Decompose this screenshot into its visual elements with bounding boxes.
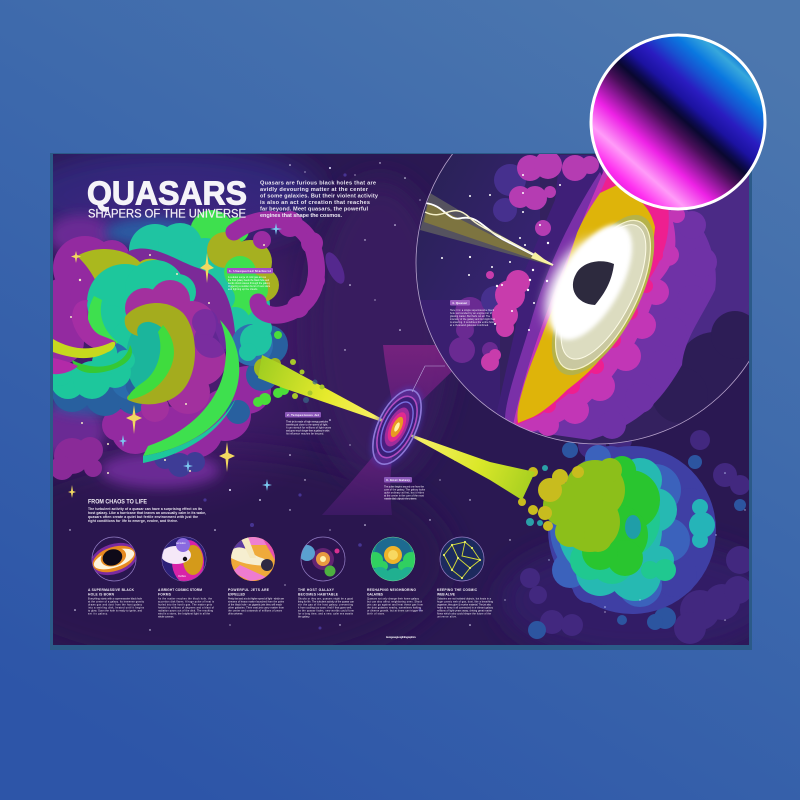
left teal blob bbox=[48, 349, 135, 399]
purple halo bbox=[520, 165, 716, 440]
far left purple cloud bbox=[449, 297, 498, 363]
blue haze behind cloud bbox=[50, 218, 195, 414]
label 1: unexpected starburst: the host galaxy feeds the black hole and bbox=[228, 279, 270, 282]
blue inner spot bbox=[625, 515, 641, 539]
label 2: tempestuous jet: It can stretch for millions of light-years bbox=[286, 426, 332, 430]
label 4: quasar: hole surrounded by an engine-hot of bbox=[450, 312, 492, 315]
step 6 text: WEB ALIVE bbox=[437, 592, 456, 596]
upper magenta clouds bbox=[509, 151, 599, 236]
zoom circle: quasar bbox=[410, 80, 775, 450]
footer credit: kurzgesagt.org/infographics bbox=[386, 635, 416, 639]
step 2 text: wind is a storm, the brightest light in all the bbox=[158, 612, 211, 616]
magnifier swatch circle bbox=[591, 35, 765, 209]
hot pink band bbox=[516, 175, 669, 425]
icon: cosmic storm bbox=[161, 537, 206, 584]
label 3: host galaxy: The pulse begins around one from the bbox=[384, 486, 425, 488]
section: from chaos to life bbox=[88, 498, 206, 523]
step 5 text: RESHAPING NEIGHBORING bbox=[367, 588, 416, 592]
step 3 text: streams of heavy matter launched from the poles bbox=[228, 600, 285, 604]
step 5 text: birth of stars. bbox=[367, 612, 385, 616]
step 2 text: accretion disk flares. A huge pulse of heat is bbox=[158, 600, 215, 604]
step 4 text: THE HOST GALAXY bbox=[298, 588, 335, 592]
label 2: tempestuous jet bbox=[285, 412, 332, 436]
left magenta tongue bbox=[53, 358, 78, 374]
label 4: quasar: at a thousand galaxies combined. bbox=[450, 324, 489, 327]
step 4 text: stir the gas of the host galaxy, preventing bbox=[298, 604, 354, 606]
blue streak by spiral bbox=[112, 343, 130, 400]
magenta cloud body bbox=[513, 170, 675, 432]
blue layer bbox=[550, 445, 690, 607]
step 2 text bbox=[158, 588, 215, 618]
step 3 text: of its universe. bbox=[228, 612, 243, 616]
step 6 text bbox=[437, 588, 494, 618]
step 4 text: BECOMES HABITABLE bbox=[298, 592, 339, 596]
step 3 text: the center and outwards of millions of years bbox=[228, 610, 283, 612]
sparkle stars bbox=[68, 223, 282, 498]
intro text: far beyond. Meet quasars, the powerful bbox=[260, 206, 368, 212]
section body: host galaxy. Like a hurricane that leaves an unusually calm in its wake, bbox=[88, 511, 206, 515]
zoom circle outline bbox=[416, 82, 778, 444]
label 1: unexpected starburst bbox=[227, 268, 273, 291]
lower purple blue puffs bbox=[154, 447, 205, 477]
step 4 text: Shocks or they are, quasars might be a good bbox=[298, 598, 354, 600]
step 4 text bbox=[298, 588, 355, 618]
intro text: engines that shape the cosmos. bbox=[260, 213, 342, 219]
galaxy callout line bbox=[412, 366, 445, 392]
section heading: FROM CHAOS TO LIFE bbox=[88, 498, 147, 506]
step 4 text: it from cooling too soon. And if that goes well, bbox=[298, 606, 352, 610]
step 2 text: radiation pours out of the disk. The resulting bbox=[158, 610, 214, 612]
small blue puffs bbox=[528, 442, 746, 639]
step 6 text: huge cosmic web of gas, dust, like a breathing bbox=[437, 600, 494, 604]
blue layer bbox=[52, 325, 288, 424]
surrounding purple clouds bbox=[520, 428, 754, 644]
purple band left of disk bbox=[505, 172, 604, 428]
poster bbox=[53, 154, 749, 645]
central spiral olive bbox=[125, 303, 195, 404]
left magenta clouds bbox=[481, 270, 530, 371]
label 3: host galaxy: at the center in the core of the most bbox=[384, 494, 424, 498]
icon: host galaxy habitable bbox=[299, 537, 345, 581]
step 2 text: whole cosmos. bbox=[158, 616, 174, 618]
intro text: is also an act of creation that reaches bbox=[260, 200, 370, 206]
dark strip left of disk bbox=[495, 155, 604, 430]
pale rings bbox=[531, 200, 675, 390]
title block bbox=[87, 174, 247, 220]
step 5 text: but can also affect neighboring ones. Shock bbox=[367, 600, 423, 604]
right galactic jet bbox=[399, 430, 584, 531]
purple haze behind cloud bbox=[35, 215, 220, 488]
cloud star dots bbox=[70, 244, 265, 474]
step 5 text: GALAXIES bbox=[367, 592, 384, 596]
section body: quasars often create a quiet but fertile environment with just the bbox=[88, 515, 198, 519]
title: QUASARS bbox=[87, 174, 247, 212]
step 6 text: flows which also could shape the future of the bbox=[437, 612, 492, 616]
step 3 text bbox=[228, 588, 285, 616]
label 1: unexpected starburst: triggering a sudden burst of new stars bbox=[228, 285, 271, 288]
label 2: tempestuous jet: and grow much longer than a galaxy is wide. bbox=[286, 430, 330, 432]
icon: cosmic storm: Outflow bbox=[178, 575, 186, 578]
label 1: unexpected starburst: A sudden surge of cold gas across bbox=[228, 276, 267, 279]
central teal core bbox=[126, 322, 161, 388]
label 2: tempestuous jet: 2. Tempestuous Jet bbox=[287, 413, 319, 417]
background dim blue star glows bbox=[203, 173, 422, 630]
black hole shadow bbox=[573, 261, 614, 305]
subtitle: SHAPERS OF THE UNIVERSE bbox=[88, 208, 246, 220]
purple band bbox=[127, 248, 236, 350]
label 4: quasar: is amazing. It outshines the entire host bbox=[450, 321, 494, 324]
teal layer bbox=[558, 458, 677, 601]
swirl right puff bbox=[326, 252, 344, 284]
green layer bbox=[582, 456, 660, 576]
debris particles bbox=[441, 174, 561, 331]
outer indigo disc bbox=[548, 446, 716, 614]
top green cap bbox=[191, 210, 248, 242]
step 5 text: or diverse growth, but at times can trigger the bbox=[367, 610, 424, 612]
outer dark clouds bbox=[652, 311, 759, 423]
step 5 text: the dust galaxies nearby, sometimes halting bbox=[367, 606, 422, 610]
label 2: tempestuous jet: Its influence reaches far beyond. bbox=[286, 432, 324, 436]
step 1 text: at the center of a galaxy. Its immense gravity bbox=[88, 600, 145, 604]
step 3 text: of the black hole - as gigantic jets they will reach bbox=[228, 604, 283, 606]
label 1: unexpected starburst: and lighting up the clouds. bbox=[228, 288, 258, 291]
step 1 text: to glow. Soon the hole is ready to ignite, and bbox=[88, 610, 143, 612]
step 6 text: organism, they give & receive material. The jet also bbox=[437, 604, 492, 606]
icon: supermassive black hole bbox=[87, 537, 141, 581]
icon: cosmic web bbox=[440, 537, 484, 581]
main teal body bbox=[87, 260, 196, 356]
label 3: host galaxy: massive black objects in the universe. bbox=[384, 498, 417, 500]
step 4 text: for a long time, and a new, calm era awaits bbox=[298, 612, 354, 616]
step 1 text: draws gas and dust from the host galaxy bbox=[88, 604, 143, 606]
intro text: avidly devouring matter at the center bbox=[260, 187, 369, 193]
step 6 text: KEEPING THE COSMIC bbox=[437, 588, 478, 592]
step 1 text: set its galaxy. bbox=[88, 612, 108, 616]
label 1: unexpected starburst: 1. Unexpected Starburst bbox=[229, 269, 271, 273]
upper teal arch bbox=[129, 223, 270, 327]
step 6 text: millions of light-years away, driving great matter bbox=[437, 610, 492, 612]
label 4: quasar: glowing matter. But that's not all. The bbox=[450, 315, 491, 318]
upper indigo clouds bbox=[481, 164, 526, 314]
teal bottom rim bbox=[143, 398, 236, 463]
left olive crescent bbox=[78, 249, 159, 280]
step 2 text: hurled into the host's gas. The matter gets bbox=[158, 604, 213, 606]
yellow disk bbox=[517, 185, 655, 423]
step 4 text: as the quasar fades, new worlds could form bbox=[298, 610, 354, 612]
step 1 text bbox=[88, 588, 145, 616]
left gas cloud bbox=[35, 210, 288, 488]
section body: The turbulent activity of a quasar can have a surprising effect on its bbox=[88, 507, 202, 511]
purple halo bumps bbox=[598, 211, 717, 439]
green inner right cloud bbox=[224, 256, 268, 316]
white glow bbox=[532, 229, 624, 341]
right gas cloud bbox=[399, 428, 754, 644]
label 3: host galaxy: quite ordinary at first, but it hides bbox=[384, 492, 425, 494]
left galactic jet bbox=[253, 331, 382, 422]
label 2: tempestuous jet: traveling at close to the speed of light. bbox=[286, 424, 328, 426]
step 3 text: EXPELLED bbox=[228, 592, 246, 596]
step 1 text: A SUPERMASSIVE BLACK bbox=[88, 588, 135, 592]
upper right magenta swirl bbox=[234, 211, 349, 318]
step 5 text: Quasars not only change their home galaxy bbox=[367, 598, 420, 600]
center magenta ring bbox=[125, 280, 226, 422]
sea green layer bbox=[570, 480, 676, 584]
green right ring bbox=[143, 320, 239, 456]
step 3 text: other galaxies. Their vast jets carry matter from bbox=[228, 606, 284, 610]
darker magenta right shade bbox=[192, 309, 226, 358]
right cloud dots bbox=[548, 472, 746, 608]
step 2 text: heated to millions of degrees and a blast of bbox=[158, 606, 214, 610]
green left rim bbox=[88, 296, 118, 350]
poster edge bbox=[50, 153, 752, 650]
step 2 text: A BRIGHT COSMIC STORM bbox=[158, 588, 202, 592]
lime front cloud bbox=[543, 458, 625, 552]
label 3: host galaxy: core of the galaxy. The galaxy looks bbox=[384, 488, 426, 492]
step 5 text: jets can go against and heat these gas from bbox=[366, 604, 423, 606]
galaxy light cone bbox=[322, 345, 452, 515]
olive upper right cloud bbox=[207, 232, 279, 302]
host galaxy bbox=[358, 378, 436, 476]
swirl puffs bbox=[253, 211, 325, 318]
step 3 text: POWERFUL JETS ARE bbox=[228, 588, 270, 592]
label 4: quasar: 4. Quasar bbox=[452, 301, 468, 305]
step 5 text bbox=[366, 588, 424, 616]
central green swirl bbox=[128, 325, 174, 400]
step 4 text: thing for life. The turbulent activity of the quasar can bbox=[298, 600, 355, 604]
label 3: host galaxy bbox=[384, 477, 426, 500]
teal inner right cloud bbox=[224, 288, 248, 333]
step 1 text: Everything starts with a supermassive black hole bbox=[88, 598, 143, 600]
step 1 text: HOLE IS BORN bbox=[88, 592, 115, 596]
step 6 text: Galaxies are not isolated objects, but knots in a bbox=[437, 598, 492, 600]
step 6 text: helps to keep it all connected in a vibrant galaxy bbox=[437, 606, 494, 610]
outer magenta layer bbox=[36, 236, 271, 458]
right blue green blob bbox=[231, 318, 273, 366]
left yellow tongue bbox=[53, 339, 115, 358]
star field bbox=[69, 162, 726, 631]
label 4: quasar: Here it is: a single supermassive black bbox=[450, 309, 495, 312]
label 3: host galaxy: 3. Host Galaxy bbox=[386, 478, 410, 482]
section body: right conditions for life to emerge, evolve, and thrive. bbox=[88, 519, 178, 523]
magenta bumps bbox=[537, 207, 685, 436]
label 1: unexpected starburst: sends shock waves through the galaxy bbox=[228, 282, 271, 285]
relativistic jet bbox=[420, 193, 553, 266]
left green streak bbox=[72, 345, 132, 373]
step 2 text: FORMS bbox=[158, 592, 172, 596]
step 2 text: As the matter reaches the black hole, the bbox=[158, 598, 213, 600]
intro text: of some galaxies. But their violent activity bbox=[260, 194, 379, 200]
step 1 text: into a swirling disk, heated until it begins bbox=[88, 606, 145, 610]
icon: recharging galaxies bbox=[367, 535, 419, 588]
step 4 text: the galaxy. bbox=[298, 616, 310, 618]
lower left purple puffs bbox=[50, 437, 103, 480]
step 6 text: universe alive. bbox=[437, 616, 457, 618]
step 3 text: Pretty fast and at a lot higher speed of light - which are bbox=[228, 598, 285, 600]
label 4: quasar bbox=[450, 300, 495, 327]
label 4: quasar: intensity of the galaxy and its bright flow bbox=[450, 318, 495, 321]
pink bumps bbox=[540, 248, 663, 413]
left magenta swirl bbox=[72, 300, 116, 350]
intro text: Quasars are furious black holes that are bbox=[260, 180, 376, 186]
icon: jets expelled bbox=[231, 537, 275, 581]
right teal puff bbox=[689, 499, 715, 548]
label 2: tempestuous jet: Their jet is made of high energy particles bbox=[286, 420, 329, 424]
icon: cosmic storm: Accretion bbox=[176, 542, 186, 545]
